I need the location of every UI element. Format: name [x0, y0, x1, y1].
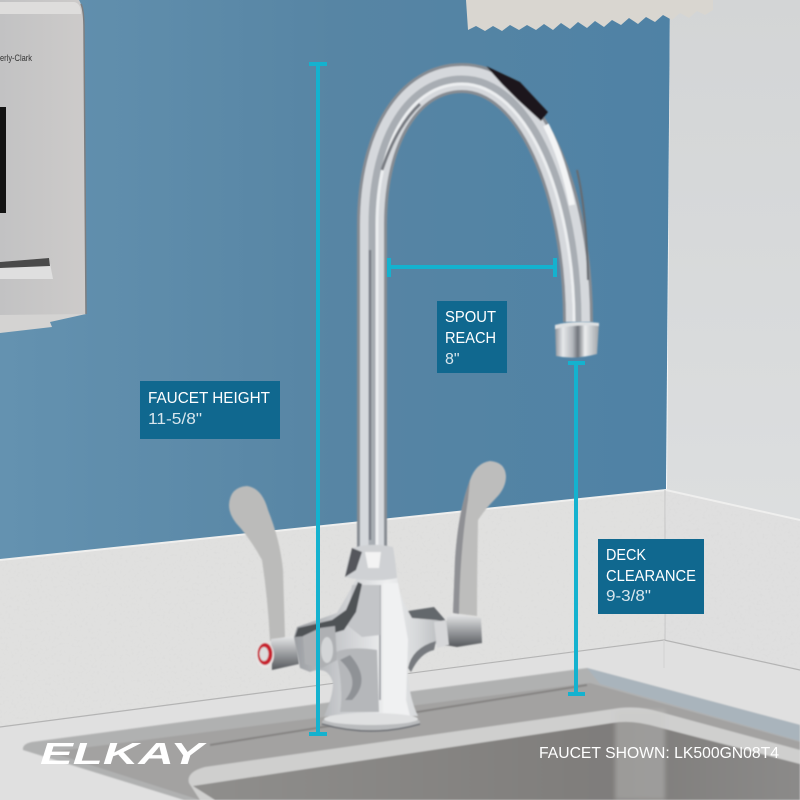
- central bright strip: [383, 583, 410, 716]
- Elkay logo: ELKAY: [40, 736, 208, 771]
- stainless steel sink: [23, 668, 800, 800]
- callout value: 11-5/8": [148, 411, 202, 428]
- red hot indicator: [256, 642, 274, 668]
- spout bright band: [372, 78, 578, 548]
- sink rim right edge: [587, 668, 800, 741]
- callout value: 9-3/8": [606, 588, 651, 605]
- dimension line: faucet height: [309, 62, 327, 736]
- callout: faucet height: [140, 381, 280, 439]
- brand text: erly-Clark: [0, 53, 32, 64]
- sink rim: [23, 668, 800, 800]
- left nut: [303, 626, 337, 668]
- right bevel: [81, 4, 86, 314]
- callout value: 8": [445, 351, 460, 368]
- model caption: FAUCET SHOWN: LK500GN08T4: [539, 745, 779, 762]
- right nut: [434, 620, 449, 648]
- right arm dark top: [408, 607, 447, 622]
- basin corner reflection: [615, 710, 665, 800]
- right handle: [445, 461, 506, 647]
- collar: [345, 545, 397, 580]
- black reflection at crown: [486, 66, 548, 121]
- spout mid band: [373, 80, 577, 548]
- centre dark seam: [379, 585, 381, 700]
- spout outer tube: [372, 78, 578, 548]
- white reflection under crown: [546, 125, 572, 205]
- pedestal mottled lobe: [336, 648, 379, 712]
- callout heading line 2: CLEARANCE: [606, 568, 696, 585]
- chrome spout: [370, 66, 588, 548]
- callout heading line 2: REACH: [445, 330, 496, 347]
- blue wall: [0, 0, 670, 560]
- callout heading line 1: SPOUT: [445, 309, 496, 326]
- right handle barrel: [445, 614, 482, 647]
- sink deck: [50, 683, 800, 800]
- sink deck shadow line: [210, 685, 587, 745]
- base flange: [322, 714, 420, 730]
- dark streak right: [577, 170, 588, 280]
- callout: deck clearance: [598, 539, 704, 614]
- dimension line: spout reach: [387, 258, 557, 277]
- paper towel dispenser: [0, 0, 87, 333]
- right handle blade shaded edge: [453, 480, 470, 614]
- left handle barrel: [271, 636, 299, 670]
- dark streak top left: [382, 104, 420, 170]
- dark left reflection: [369, 250, 371, 540]
- countertop: [0, 640, 800, 800]
- left arm dark top: [295, 582, 362, 637]
- ball reflection: [347, 585, 380, 637]
- spout core highlight: [377, 84, 574, 548]
- body silhouette: [294, 577, 449, 716]
- dark window: [0, 107, 6, 213]
- basin interior: [193, 722, 800, 800]
- left handle: [229, 486, 299, 670]
- bottom lip: [0, 314, 86, 333]
- right handle blade: [453, 461, 506, 616]
- callout heading: FAUCET HEIGHT: [148, 390, 271, 407]
- right arm reflection: [408, 641, 436, 672]
- dispenser body: [0, 0, 86, 322]
- basin rolled edge: [189, 708, 800, 800]
- top bevel: [0, 2, 81, 14]
- callout heading line 1: DECK: [606, 547, 647, 564]
- dispensing slot: [0, 258, 53, 279]
- left handle blade: [229, 486, 285, 641]
- right side wall: [667, 0, 800, 520]
- aerator: [555, 322, 599, 358]
- paper towel: [466, 0, 713, 31]
- backsplash: [0, 480, 800, 730]
- dimension line: deck clearance: [568, 361, 585, 696]
- faucet base body: [294, 545, 449, 731]
- pedestal fold: [340, 655, 362, 700]
- callout: spout reach: [437, 301, 507, 373]
- shadow of faucet on wall: [391, 130, 399, 520]
